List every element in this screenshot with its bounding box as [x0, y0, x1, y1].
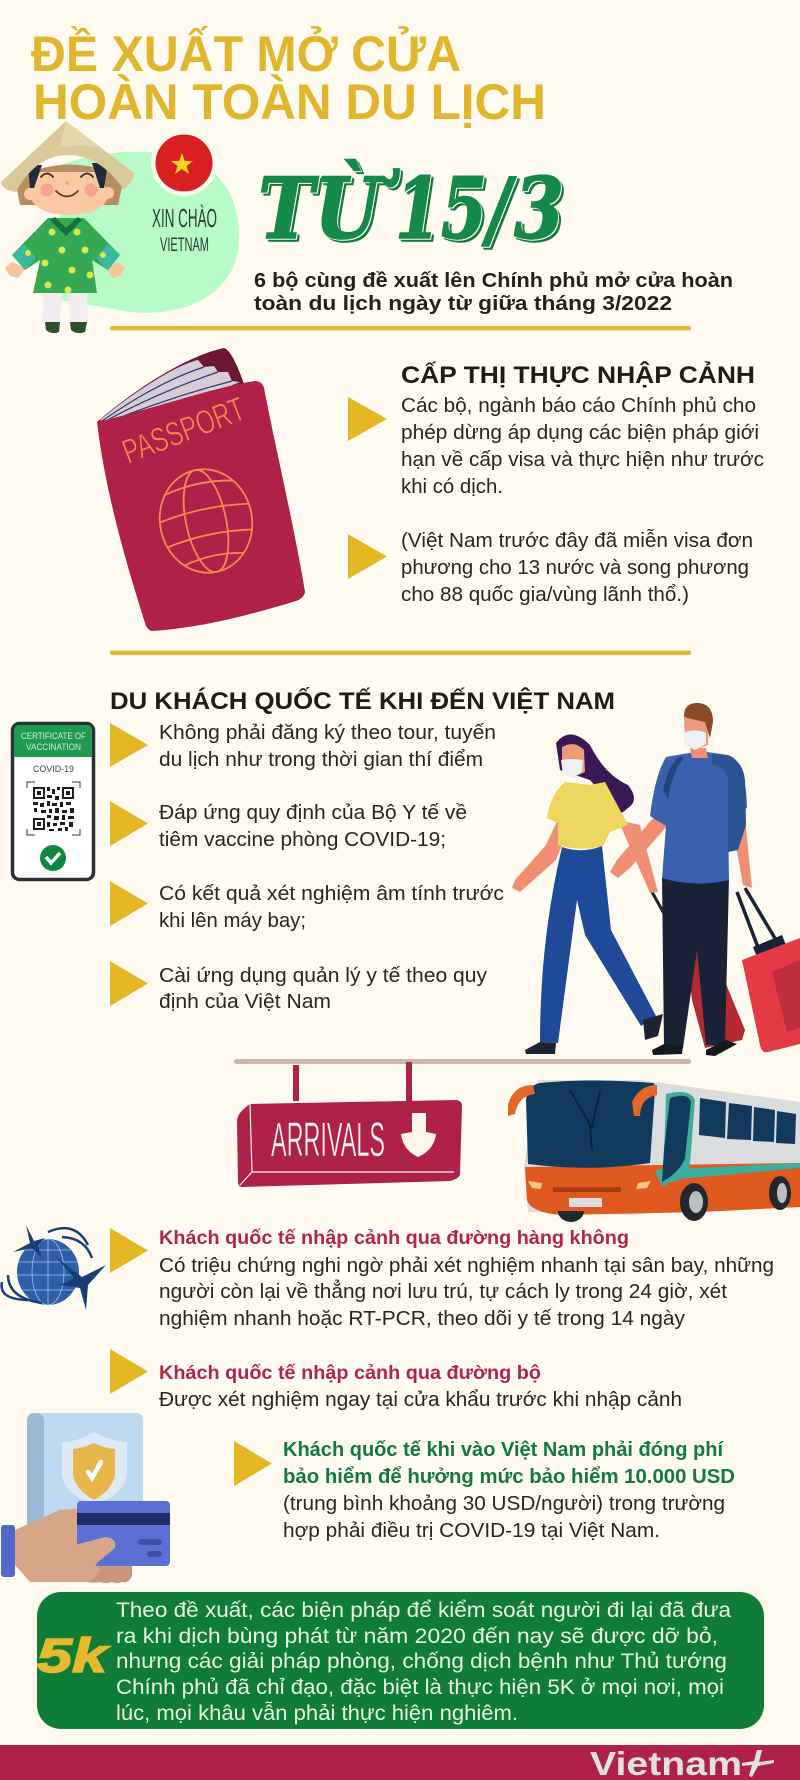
icon: passport — [97, 348, 305, 631]
icon: insurance and payment card — [1, 1413, 170, 1583]
greeting text — [152, 203, 217, 256]
text block: 5K note: Theo đề xuất, các biện pháp để kiểm soát người đi lại đã đưa — [116, 1599, 731, 1622]
panel: 5K note — [37, 1592, 764, 1729]
heading: international visitors: DU KHÁCH QUỐC TẾ KHI ĐẾN VIỆT NAM — [110, 687, 615, 715]
title: ĐỀ XUẤT MỞ CỬA — [31, 25, 461, 82]
icon: vaccination certificate: VACCINATION — [26, 742, 81, 752]
arrow marker — [234, 1441, 272, 1486]
text block: visa measures — [401, 395, 764, 498]
block: land entry — [110, 1349, 682, 1411]
text block: visa exemption: phương cho 13 nước và song phương — [401, 557, 749, 579]
title — [31, 25, 546, 130]
mint background blob — [60, 152, 239, 313]
heading: air entry: Khách quốc tế nhập cảnh qua đường hàng không — [159, 1227, 629, 1249]
arrow marker — [110, 1228, 148, 1273]
text block: air entry: người còn lại về thẳng nơi lưu trú, tự cách ly trong 24 giờ, xét — [159, 1279, 727, 1303]
man — [610, 810, 668, 878]
heading: land entry: Khách quốc tế nhập cảnh qua đường bộ — [159, 1362, 541, 1384]
arrow marker — [348, 534, 387, 579]
text block: 5K note: lúc, mọi khâu vẫn phải thực hiện nghiêm. — [116, 1702, 518, 1725]
icon: vaccination certificate: CERTIFICATE OF — [21, 731, 86, 741]
arrow marker — [348, 397, 387, 441]
icon: 5k: 5k — [37, 1630, 110, 1683]
requirement 2: tiêm vaccine phòng COVID-19; — [159, 829, 446, 851]
arrow marker — [110, 881, 148, 926]
text block: 5K note: nhưng các giải pháp phòng, chống dịch bệnh như Thủ tướng — [116, 1650, 727, 1673]
requirement 3 — [159, 883, 504, 932]
greeting text: VIETNAM — [160, 234, 209, 256]
section: visa — [348, 360, 764, 606]
text block: visa measures: hạn về cấp visa và thực hiện như trước — [401, 449, 764, 471]
big date heading: 15 — [395, 159, 487, 258]
text block: 5K note: Chính phủ đã chỉ đạo, đặc biệt là thực hiện 5K ở mọi nơi, mọi — [116, 1676, 724, 1699]
title: HOÀN TOÀN DU LỊCH — [33, 74, 546, 130]
requirement 3: Có kết quả xét nghiệm âm tính trước — [159, 883, 504, 905]
subtitle: 6 bộ cùng đề xuất lên Chính phủ mở cửa hoàn — [254, 269, 733, 292]
big date heading — [258, 159, 564, 258]
front suitcase and handle — [737, 888, 779, 950]
subtitle — [254, 269, 733, 315]
text block: insurance: Khách quốc tế khi vào Việt Nam phải đóng phí — [283, 1439, 724, 1461]
greeting text: XIN CHÀO — [152, 203, 217, 233]
icon: Vietnam flag — [151, 130, 217, 196]
icon: character in conical hat — [1, 121, 134, 333]
back suitcase — [686, 945, 745, 1048]
subtitle: toàn du lịch ngày từ giữa tháng 3/2022 — [254, 292, 672, 315]
text block: visa measures: phép dừng áp dụng các biện pháp giới — [401, 422, 759, 444]
text block: insurance: hợp phải điều trị COVID-19 tại Việt Nam. — [283, 1520, 660, 1542]
icon: vaccination certificate: COVID-19 — [33, 764, 74, 775]
text: land entry: Được xét nghiệm ngay tại cửa khẩu trước khi nhập cảnh — [159, 1389, 682, 1411]
block: insurance — [234, 1439, 735, 1542]
icon: arrivals sign: ARRIVALS — [271, 1114, 385, 1167]
heading: visa: CẤP THỊ THỰC NHẬP CẢNH — [401, 360, 755, 389]
footer band with logo — [0, 1745, 800, 1780]
arrow marker — [110, 723, 148, 767]
icon: globe with planes — [2, 1225, 106, 1310]
text block: visa exemption: (Việt Nam trước đây đã miễn visa đơn — [401, 529, 753, 552]
arrow marker — [110, 801, 148, 846]
requirement 1: Không phải đăng ký theo tour, tuyến — [159, 722, 496, 744]
block: air entry — [110, 1227, 774, 1330]
text block: air entry: Có triệu chứng nghi ngờ phải xét nghiệm nhanh tại sân bay, những — [159, 1255, 774, 1277]
big date heading: / — [482, 159, 517, 258]
icon: bus — [508, 1080, 800, 1222]
text block: 5K note: ra khi dịch bùng phát từ năm 2020 đến nay sẽ được dỡ bỏ, — [116, 1625, 718, 1648]
text block: visa exemption — [401, 529, 753, 606]
text block: insurance: (trung bình khoảng 30 USD/người) trong trường — [283, 1493, 725, 1515]
text block: insurance: bảo hiểm để hưởng mức bảo hiểm 10.000 USD — [283, 1466, 735, 1488]
requirement 1 — [159, 722, 496, 771]
text block: visa measures: khi có dịch. — [401, 476, 503, 498]
text block: visa measures: Các bộ, ngành báo cáo Chính phủ cho — [401, 395, 756, 417]
requirement 4: định của Việt Nam — [159, 991, 331, 1013]
text block: visa exemption: cho 88 quốc gia/vùng lãnh thổ.) — [401, 584, 689, 606]
arrow marker — [110, 961, 148, 1006]
requirement 3: khi lên máy bay; — [159, 910, 306, 932]
big date heading: 3 — [514, 159, 564, 258]
requirement 4 — [159, 965, 487, 1013]
text block: air entry — [159, 1255, 774, 1330]
requirement 1: du lịch như trong thời gian thí điểm — [159, 749, 483, 771]
icon: passport: PASSPORT — [117, 390, 250, 471]
text block: 5K note — [116, 1599, 731, 1725]
woman — [556, 734, 634, 815]
text block: air entry: nghiệm nhanh hoặc RT-PCR, theo dõi y tế trong 14 ngày — [159, 1308, 685, 1330]
requirement 2: Đáp ứng quy định của Bộ Y tế về — [159, 802, 467, 824]
requirement 2 — [159, 802, 467, 851]
list: visitor requirements — [110, 722, 504, 1013]
icon: vaccination certificate — [12, 724, 94, 880]
arrow marker — [110, 1349, 148, 1394]
illustration: travelling couple — [512, 703, 800, 1056]
requirement 4: Cài ứng dụng quản lý y tế theo quy — [159, 965, 487, 987]
big date heading: TỪ — [258, 159, 400, 258]
text block: insurance — [283, 1439, 735, 1542]
icon: arrivals sign — [237, 1062, 462, 1187]
